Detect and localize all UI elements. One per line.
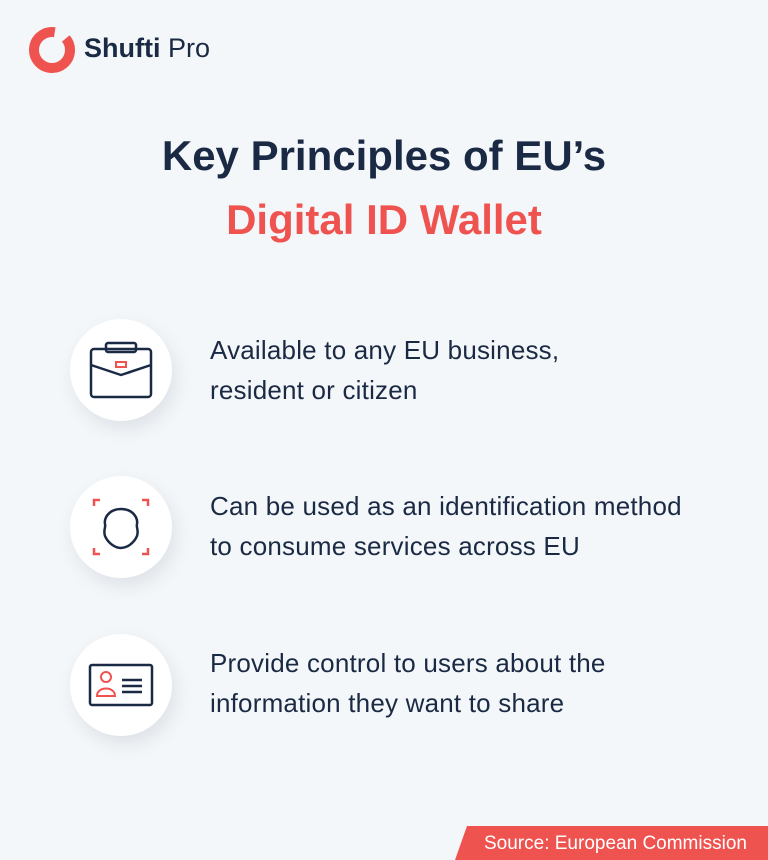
text 1 <box>210 335 559 405</box>
text 3: Provide control to users about the <box>210 648 606 678</box>
source banner: Source: European Commission <box>484 833 747 854</box>
text 2: to consume services across EU <box>210 531 580 561</box>
icon: id card <box>70 634 172 736</box>
item 1 <box>70 319 559 431</box>
title: Key Principles of EU’s <box>162 132 606 179</box>
text 2: Can be used as an identification method <box>210 491 682 521</box>
logo <box>29 27 210 73</box>
logo: Shufti Pro <box>84 33 210 63</box>
source banner <box>455 826 768 860</box>
icon: briefcase <box>70 319 172 421</box>
text 1: resident or citizen <box>210 375 418 405</box>
text 1: Available to any EU business, <box>210 335 559 365</box>
icon: face scan <box>70 476 172 578</box>
text 3: information they want to share <box>210 688 564 718</box>
text 3 <box>210 648 606 718</box>
item 2 <box>70 476 682 588</box>
text 2 <box>210 491 682 561</box>
item 3 <box>70 634 606 746</box>
subtitle: Digital ID Wallet <box>226 196 542 243</box>
